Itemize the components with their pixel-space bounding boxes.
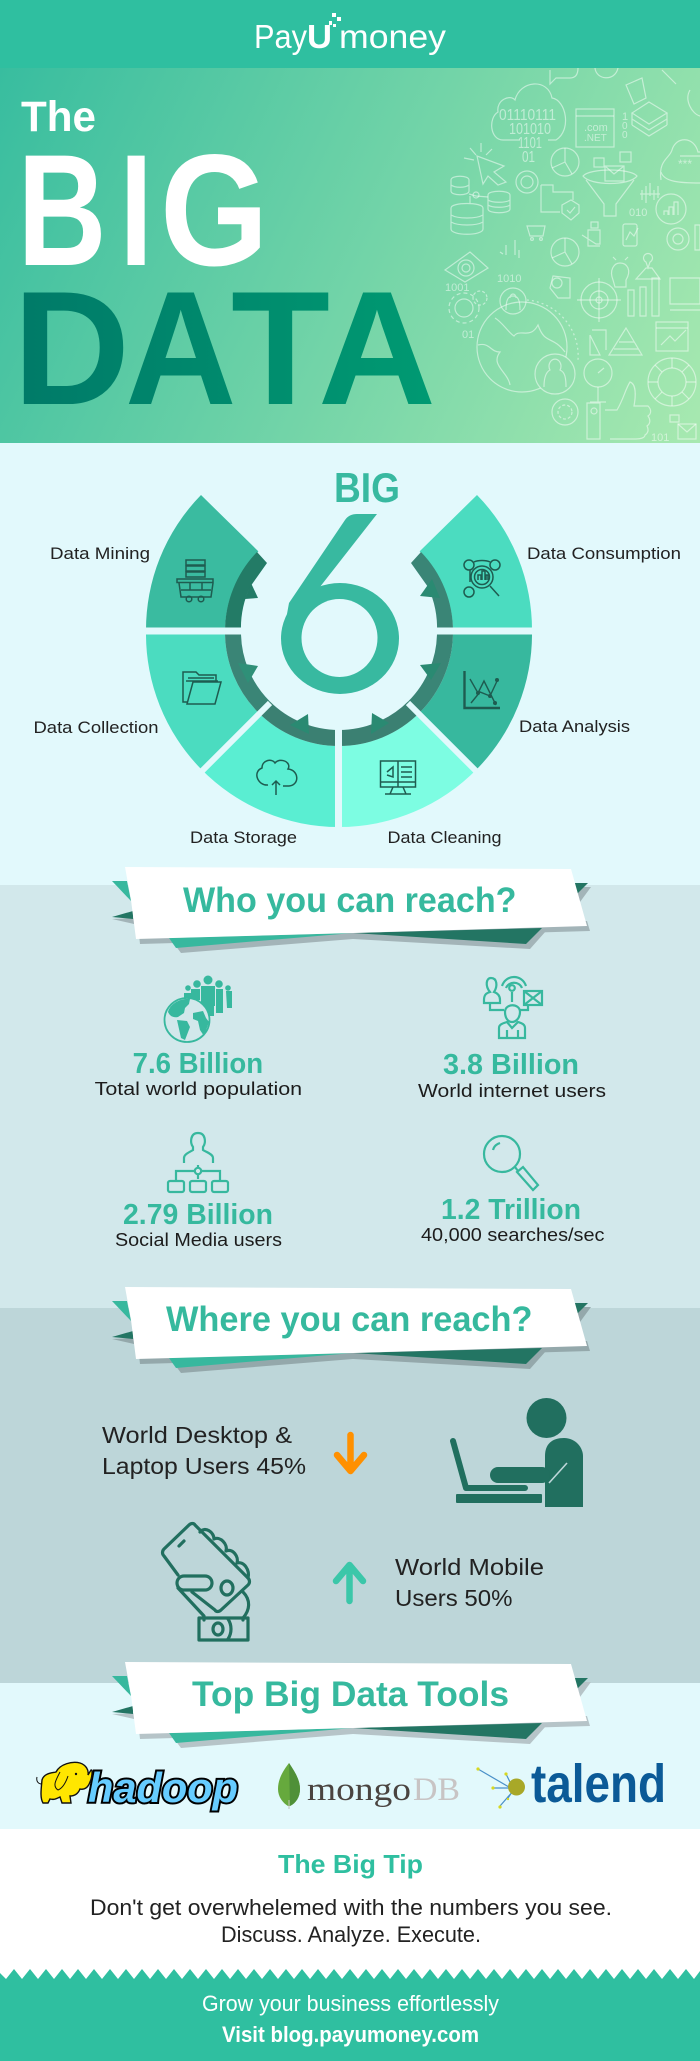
title: DATA: D	[13, 258, 130, 439]
decorative data icon cluster: 1	[622, 111, 628, 123]
stat label: 40,000 searches/sec: 40,000 searches/sec	[421, 1225, 604, 1245]
label: data mining: Data Mining	[50, 544, 150, 563]
logo: mongodb: mongo	[307, 1772, 411, 1808]
text: mobile users	[395, 1554, 544, 1611]
segment: data analysis	[408, 632, 532, 769]
segment: data cleaning	[339, 701, 477, 827]
text: mobile users: Users 50%	[395, 1585, 512, 1611]
icon: hand holding phone	[162, 1524, 250, 1640]
decorative data icon cluster: .com	[584, 122, 608, 134]
text: desktop users	[102, 1422, 306, 1479]
logo: PayUmoney	[254, 13, 447, 55]
icon: monitor	[380, 761, 416, 794]
banner: where you can reach	[112, 1287, 591, 1373]
label: data storage: Data Storage	[190, 828, 297, 847]
logo: talend: talend	[531, 1754, 666, 1814]
heading: BIG: BIG	[334, 464, 400, 511]
segment: data storage	[201, 701, 339, 827]
stat: 2.79 billion: 2.79 Billion	[123, 1199, 273, 1231]
decorative data icon cluster: 101010	[509, 121, 551, 138]
panel: where you can reach	[0, 1308, 700, 1683]
text: desktop users: World Desktop &	[102, 1422, 292, 1448]
icon: folder	[183, 672, 221, 704]
label: data collection: Data Collection	[34, 718, 158, 737]
stat: 1.2 trillion: 1.2 Trillion	[441, 1194, 581, 1226]
banner: who you can reach	[112, 867, 591, 953]
decorative data icon cluster	[445, 68, 700, 444]
stat label: total world population: Total world population	[95, 1079, 302, 1099]
logo: mongodb	[278, 1763, 460, 1809]
text: grow your business: Grow your business effortlessly	[202, 1991, 499, 2016]
banner: top big data tools	[112, 1662, 591, 1748]
tip text: Discuss. Analyze. Execute.	[221, 1922, 481, 1947]
title: BIG: I	[120, 121, 153, 299]
icon: line chart	[464, 671, 500, 708]
heading: Who you can reach?	[183, 881, 516, 920]
stat: 3.8 billion: 3.8 Billion	[443, 1049, 579, 1081]
stat label: world internet users: World internet users	[418, 1081, 606, 1101]
decorative data icon cluster: 01110111	[499, 107, 556, 124]
segment: data consumption	[411, 495, 532, 632]
icon: person at laptop	[453, 1398, 583, 1507]
decorative data icon cluster: 010	[629, 207, 647, 219]
title: BIG: B	[18, 121, 106, 299]
logo: mongodb: DB	[413, 1772, 460, 1808]
title: DATA: A	[318, 258, 436, 439]
icon: mine cart and servers	[177, 560, 213, 602]
logo: talend	[476, 1754, 666, 1814]
icon: people analytics magnifier	[464, 560, 500, 597]
title: DATA: A	[125, 258, 236, 439]
text: mobile users: World Mobile	[395, 1554, 544, 1580]
decorative data icon cluster: 1001	[445, 282, 469, 294]
segment: data mining	[146, 495, 267, 632]
decorative data icon cluster: 0	[622, 130, 628, 141]
title: DATA	[13, 258, 436, 439]
icon: social media org chart	[168, 1133, 228, 1192]
decorative data icon cluster: ***	[678, 157, 692, 171]
panel: big 6	[0, 443, 700, 885]
title: BIG: G	[160, 121, 268, 299]
segment: data collection	[146, 632, 270, 769]
heading: the big tip: The Big Tip	[278, 1849, 423, 1879]
logo: PayUmoney: Pay	[254, 18, 307, 55]
decorative data icon cluster: .NET	[584, 133, 607, 144]
arrow: up teal	[336, 1565, 363, 1601]
arrow: down orange	[337, 1435, 364, 1471]
title: The: The	[21, 93, 96, 141]
segment dividers	[135, 631, 545, 835]
logo: PayUmoney: U	[307, 18, 332, 55]
numeral: 6	[281, 514, 399, 694]
logo: hadoop: hadoop	[88, 1764, 238, 1811]
decorative data icon cluster: 0	[622, 121, 628, 132]
heading: Top Big Data Tools	[192, 1675, 509, 1714]
text: visit blog: Visit blog.payumoney.com	[222, 2022, 479, 2047]
icon: magnifier	[484, 1136, 538, 1190]
panel: top big data tools	[0, 1683, 700, 1829]
heading: Where you can reach?	[166, 1300, 532, 1339]
decorative data icon cluster: 01	[522, 149, 535, 166]
tip text: Don't get overwhelemed with the numbers you see.	[90, 1895, 612, 1920]
title: DATA: T	[231, 258, 330, 439]
icon: world population	[164, 976, 232, 1042]
logo: PayUmoney: money	[339, 18, 447, 55]
label: data cleaning: Data Cleaning	[388, 828, 502, 847]
decorative data icon cluster: 01	[462, 329, 474, 341]
stat: 7.6 billion: 7.6 Billion	[133, 1048, 263, 1080]
icon: cloud upload	[257, 760, 297, 795]
decorative data icon cluster: 101	[651, 432, 669, 444]
panel: hero	[0, 68, 700, 444]
panel: the big tip	[0, 1829, 700, 1979]
title: BIG	[18, 121, 268, 299]
label: data analysis: Data Analysis	[519, 717, 630, 736]
icon: world internet users	[484, 977, 542, 1038]
decorative data icon cluster: 1010	[497, 273, 521, 285]
panel: who you can reach	[0, 885, 700, 1308]
label: data consumption: Data Consumption	[527, 544, 681, 563]
text: desktop users: Laptop Users 45%	[102, 1453, 306, 1479]
panel: footer	[0, 1969, 700, 2061]
panel: header bar	[0, 0, 700, 68]
decorative data icon cluster: 1101	[518, 135, 542, 152]
tip text	[90, 1895, 612, 1947]
stat label: social media users: Social Media users	[115, 1230, 282, 1250]
